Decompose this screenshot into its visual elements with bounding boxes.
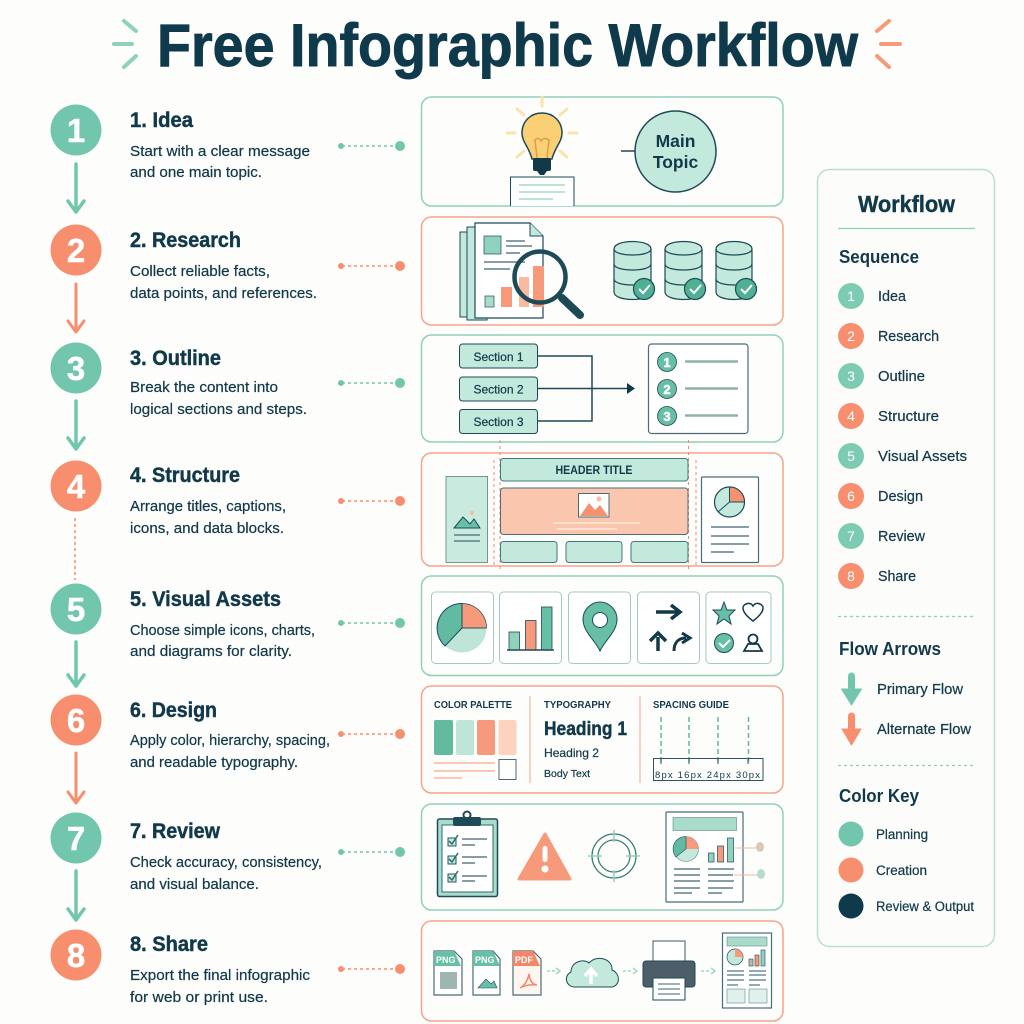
panel: design: Body Text [544, 768, 590, 780]
step 5: 5. Visual Assets [130, 588, 281, 611]
panel: structure: HEADER TITLE [556, 465, 633, 477]
panel: workflow sidebar [818, 170, 994, 946]
sequence list: Review [878, 529, 926, 545]
color key: Review & Output [876, 899, 974, 914]
step 4: Arrange titles, captions, [130, 498, 286, 515]
step 3: Break the content into [130, 379, 278, 396]
step 7: 7 [67, 820, 85, 857]
step 7 [50, 812, 322, 920]
panel: share: PNG [436, 955, 456, 965]
panel: workflow sidebar: Flow Arrows [839, 639, 941, 659]
step 6: 6 [67, 702, 85, 739]
step 3: 3. Outline [130, 347, 221, 370]
panel: idea [422, 97, 783, 206]
step 5 [50, 584, 315, 686]
color key: Planning [876, 827, 928, 842]
panel: share [422, 921, 783, 1021]
step 2: 2. Research [130, 229, 241, 252]
sequence list: Research [878, 329, 939, 345]
sequence list: 8 [847, 568, 855, 584]
sequence list: Share [878, 569, 916, 585]
title: Free Infographic Workflow [157, 12, 858, 79]
step 4: icons, and data blocks. [130, 520, 284, 537]
panel: design: Heading 1 [544, 719, 627, 740]
sequence list: 6 [847, 488, 855, 504]
step 8: for web or print use. [130, 989, 268, 1006]
color key: Creation [876, 863, 927, 878]
step 6 [50, 694, 330, 803]
panel: design: COLOR PALETTE [434, 699, 512, 711]
step 4: 4. Structure [130, 464, 240, 487]
step 1: 1. Idea [130, 109, 193, 132]
panel: outline [422, 335, 783, 442]
step 8 [50, 930, 311, 1006]
step 8: 8. Share [130, 933, 208, 956]
sequence list: 5 [847, 448, 855, 464]
connectors [338, 141, 405, 974]
panel: design: SPACING GUIDE [653, 699, 729, 711]
color key [838, 822, 974, 918]
step 7: Check accuracy, consistency, [130, 854, 322, 871]
sequence list: Visual Assets [878, 449, 967, 465]
panel: workflow sidebar: Color Key [839, 786, 919, 806]
panel: design [422, 686, 783, 793]
step 5: 5 [67, 591, 85, 628]
panel: share: PNG [475, 955, 495, 965]
panel: review [422, 804, 783, 910]
sequence list: 1 [847, 288, 855, 304]
step 5: and diagrams for clarity. [130, 643, 292, 660]
step 2: data points, and references. [130, 285, 317, 302]
sequence list: 2 [847, 328, 855, 344]
panel: outline: Section 2 [473, 382, 524, 396]
panel: workflow sidebar: Sequence [839, 247, 919, 267]
step 2 [50, 224, 317, 332]
panel: visual assets [422, 576, 783, 676]
step 3: logical sections and steps. [130, 401, 307, 418]
step 2: 2 [67, 232, 85, 269]
sequence list: Structure [878, 409, 939, 425]
panel: research [422, 217, 783, 325]
flow arrows legend [842, 676, 972, 745]
step 6: Apply color, hierarchy, spacing, [130, 732, 330, 749]
sequence list: Outline [878, 369, 925, 385]
panel: outline: Section 3 [473, 415, 524, 429]
panel: outline: 3 [663, 409, 671, 424]
sequence list: Design [878, 489, 923, 505]
sequence list [838, 283, 967, 589]
step 1: 1 [67, 112, 85, 149]
panel: design: 8px 16px 24px 30px [655, 770, 760, 781]
panel: workflow sidebar: Workflow [858, 191, 955, 217]
step 2: Collect reliable facts, [130, 263, 270, 280]
step 1: and one main topic. [130, 164, 262, 181]
panel: structure [422, 440, 783, 572]
step 8: 8 [67, 937, 85, 974]
step 7: and visual balance. [130, 876, 259, 893]
sequence list: Idea [878, 289, 907, 305]
panel: outline: 1 [663, 355, 671, 370]
flow arrows legend: Alternate Flow [877, 722, 972, 738]
step 3 [50, 342, 307, 449]
panel: outline: 2 [663, 382, 671, 397]
step 7: 7. Review [130, 820, 221, 843]
step 1 [50, 104, 310, 212]
step 4 [50, 460, 286, 580]
panel: share: PDF [515, 955, 534, 965]
step 5: Choose simple icons, charts, [130, 622, 315, 639]
sequence list: 4 [847, 408, 855, 424]
step 6: 6. Design [130, 699, 217, 722]
panel: idea: Topic [653, 152, 698, 172]
panel: idea: Main [656, 131, 695, 151]
flow arrows legend: Primary Flow [877, 682, 964, 698]
step 1: Start with a clear message [130, 143, 310, 160]
step 3: 3 [67, 350, 85, 387]
panel: outline: Section 1 [473, 350, 524, 364]
step 8: Export the final infographic [130, 967, 311, 984]
panel: design: Heading 2 [544, 746, 599, 760]
panel: design: TYPOGRAPHY [544, 699, 611, 711]
step 4: 4 [67, 468, 86, 505]
sequence list: 7 [847, 528, 855, 544]
sequence list: 3 [847, 368, 855, 384]
step 6: and readable typography. [130, 754, 298, 771]
